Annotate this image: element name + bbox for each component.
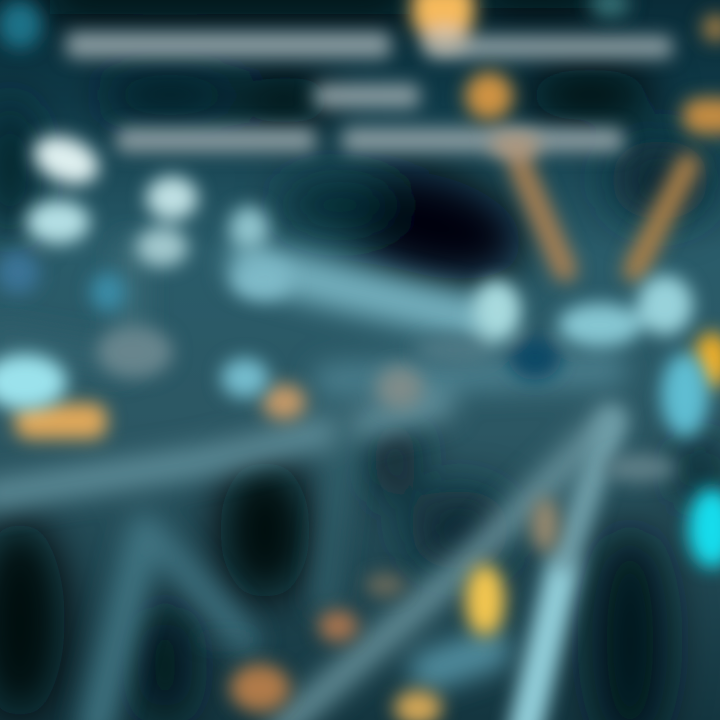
network beams [0, 250, 610, 720]
title text bars [66, 32, 673, 152]
light cyan nodes [0, 0, 720, 568]
